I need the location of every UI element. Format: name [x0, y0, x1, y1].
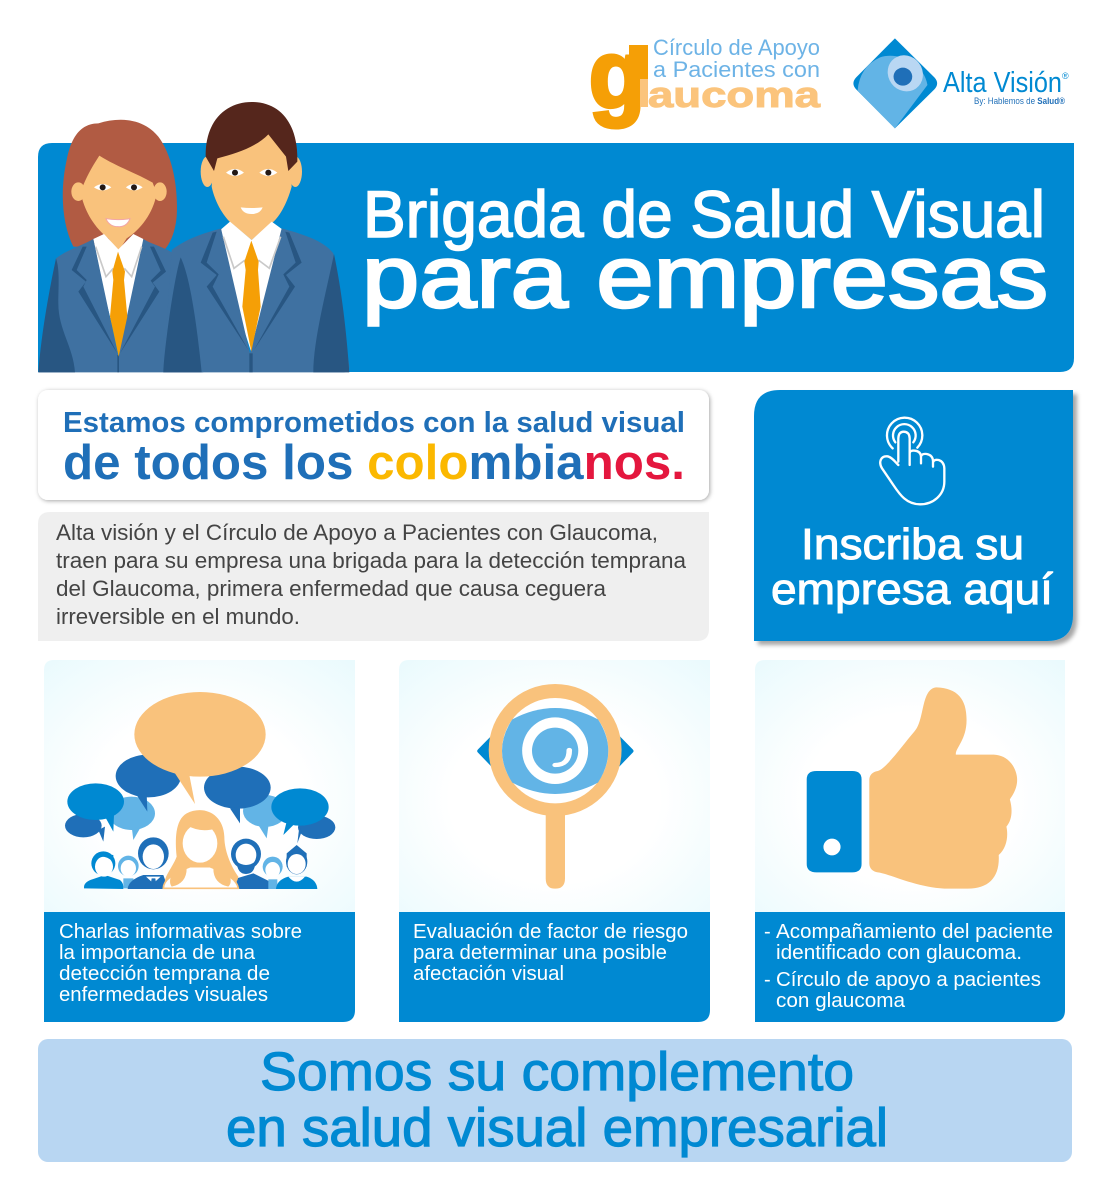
logo: Alta Visión: Alta Visión	[943, 67, 1062, 99]
logo: Círculo de Apoyo a Pacientes con Glaucoma	[589, 21, 821, 128]
card text: charlas: Charlas informativas sobre	[59, 921, 302, 943]
card text: acompañamiento: Acompañamiento del paciente	[776, 921, 1053, 943]
commitment heading: de todos los colombianos.	[63, 436, 685, 490]
card text: evaluación	[413, 921, 688, 985]
title: Brigada de Salud Visual	[363, 177, 1045, 251]
logo: Círculo de Apoyo a Pacientes con Glaucoma: a Pacientes con	[653, 57, 820, 82]
card text: evaluación: para determinar una posible	[413, 942, 667, 964]
card text: charlas: detección temprana de	[59, 963, 270, 985]
card text: acompañamiento: identificado con glaucoma.	[776, 942, 1022, 964]
card text: acompañamiento: -	[764, 921, 771, 943]
woman	[38, 120, 203, 372]
call to action text: empresa aquí	[771, 565, 1054, 614]
logo: Alta Visión: By: Hablemos de Salud®	[974, 96, 1065, 106]
card text: charlas: la importancia de una	[59, 942, 256, 964]
logo: Alta Visión: ®	[1062, 71, 1069, 81]
closing message	[226, 1042, 888, 1158]
icon: pointing hand	[880, 418, 944, 504]
title: para empresas	[362, 227, 1048, 326]
title	[362, 177, 1048, 326]
call to action text: Inscriba su	[801, 520, 1024, 569]
intro text panel: Alta visión y el Círculo de Apoyo a Pacientes con Glaucoma,	[56, 520, 658, 545]
header banner	[38, 102, 1074, 372]
card text: evaluación: Evaluación de factor de riesgo	[413, 921, 688, 943]
intro text panel: irreversible en el mundo.	[56, 604, 300, 629]
call to action panel	[754, 390, 1073, 641]
call to action text	[771, 520, 1054, 614]
card: charlas	[44, 660, 355, 1022]
card text: acompañamiento: Círculo de apoyo a pacientes	[776, 969, 1041, 991]
card: acompañamiento	[755, 660, 1065, 1022]
logo: Círculo de Apoyo a Pacientes con Glaucoma: aucoma	[648, 74, 821, 115]
card text: acompañamiento	[764, 921, 1053, 1012]
intro text panel: del Glaucoma, primera enfermedad que causa ceguera	[56, 576, 606, 601]
card text: evaluación: afectación visual	[413, 963, 564, 985]
card text: acompañamiento: con glaucoma	[776, 990, 906, 1012]
logo: Círculo de Apoyo a Pacientes con Glaucoma: g	[589, 21, 645, 128]
card: evaluación	[399, 660, 710, 1022]
commitment heading	[63, 407, 685, 490]
card text: charlas: enfermedades visuales	[59, 984, 268, 1006]
card text: acompañamiento: -	[764, 969, 771, 991]
intro text panel	[38, 512, 709, 641]
commitment box	[38, 390, 709, 500]
central woman figure	[163, 810, 238, 888]
closing message: Somos su complemento	[260, 1042, 854, 1102]
logo: Círculo de Apoyo a Pacientes con Glaucoma: Círculo de Apoyo	[653, 35, 820, 60]
card text: charlas	[59, 921, 302, 1006]
intro text panel: traen para su empresa una brigada para la detección temprana	[56, 548, 686, 573]
icon: thumbs up	[807, 687, 1017, 889]
small figures	[84, 837, 317, 889]
man	[163, 102, 349, 372]
icon: magnifier over eye	[477, 684, 634, 889]
commitment heading: Estamos comprometidos con la salud visual	[63, 407, 685, 439]
logo: Alta Visión	[853, 38, 1069, 128]
bottom banner	[38, 1039, 1072, 1162]
illustration: crowd with speech bubbles	[65, 692, 335, 889]
illustration: two business people	[38, 102, 349, 372]
closing message: en salud visual empresarial	[226, 1098, 888, 1158]
